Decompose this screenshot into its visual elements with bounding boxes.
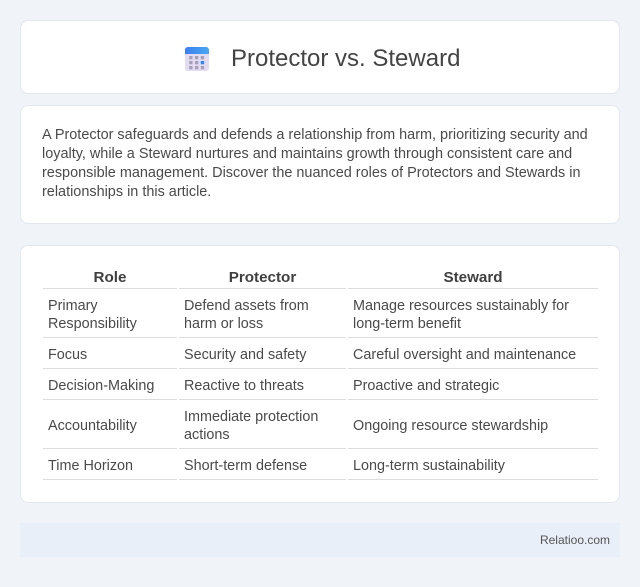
row: Time Horizon: Time Horizon [48, 458, 133, 474]
footer credit: Relatioo.com [540, 533, 610, 547]
cell: steward time horizon: Long-term sustainability [353, 458, 505, 474]
cell: steward responsibility: Manage resources sustainably for [353, 298, 569, 314]
row: Accountability: Accountability [48, 418, 137, 434]
cell: protector responsibility [184, 298, 309, 332]
intro text: A Protector safeguards and defends a relationship from harm, prioritizing security and [42, 127, 588, 143]
cell: steward responsibility [353, 298, 569, 332]
title: Protector vs. Steward [231, 45, 460, 72]
cell: protector responsibility: Defend assets from [184, 298, 309, 314]
row: Primary Responsibility: Responsibility [48, 316, 137, 332]
row: Primary Responsibility: Primary [48, 298, 98, 314]
icon: calendar [185, 47, 209, 71]
cell: steward decision-making: Proactive and strategic [353, 378, 499, 394]
table header: Role: Role [94, 269, 126, 286]
panel: comparison table [20, 245, 620, 503]
cell: protector accountability: actions [184, 427, 230, 443]
row: Primary Responsibility [48, 298, 137, 332]
row: Focus: Focus [48, 347, 87, 363]
cell: protector decision-making: Reactive to threats [184, 378, 304, 394]
cell: protector accountability [184, 409, 318, 443]
panel: header [20, 20, 620, 94]
cell: steward responsibility: long-term benefit [353, 316, 461, 332]
intro text: responsible management. Discover the nuanced roles of Protectors and Stewards in [42, 165, 580, 181]
intro text: loyalty, while a Steward nurtures and maintains growth through consistent care and [42, 146, 572, 162]
table header: Protector: Protector [229, 269, 296, 286]
cell: protector responsibility: harm or loss [184, 316, 263, 332]
cell: protector time horizon: Short-term defense [184, 458, 307, 474]
cell: steward focus: Careful oversight and maintenance [353, 347, 576, 363]
cell: steward accountability: Ongoing resource stewardship [353, 418, 548, 434]
table header: Steward: Steward [443, 269, 503, 286]
intro text [42, 127, 588, 200]
cell: protector focus: Security and safety [184, 347, 306, 363]
cell: protector accountability: Immediate protection [184, 409, 318, 425]
row: Decision-Making: Decision-Making [48, 378, 154, 394]
intro text: relationships in this article. [42, 184, 211, 200]
footer bar [20, 523, 620, 557]
panel: introduction [20, 105, 620, 224]
